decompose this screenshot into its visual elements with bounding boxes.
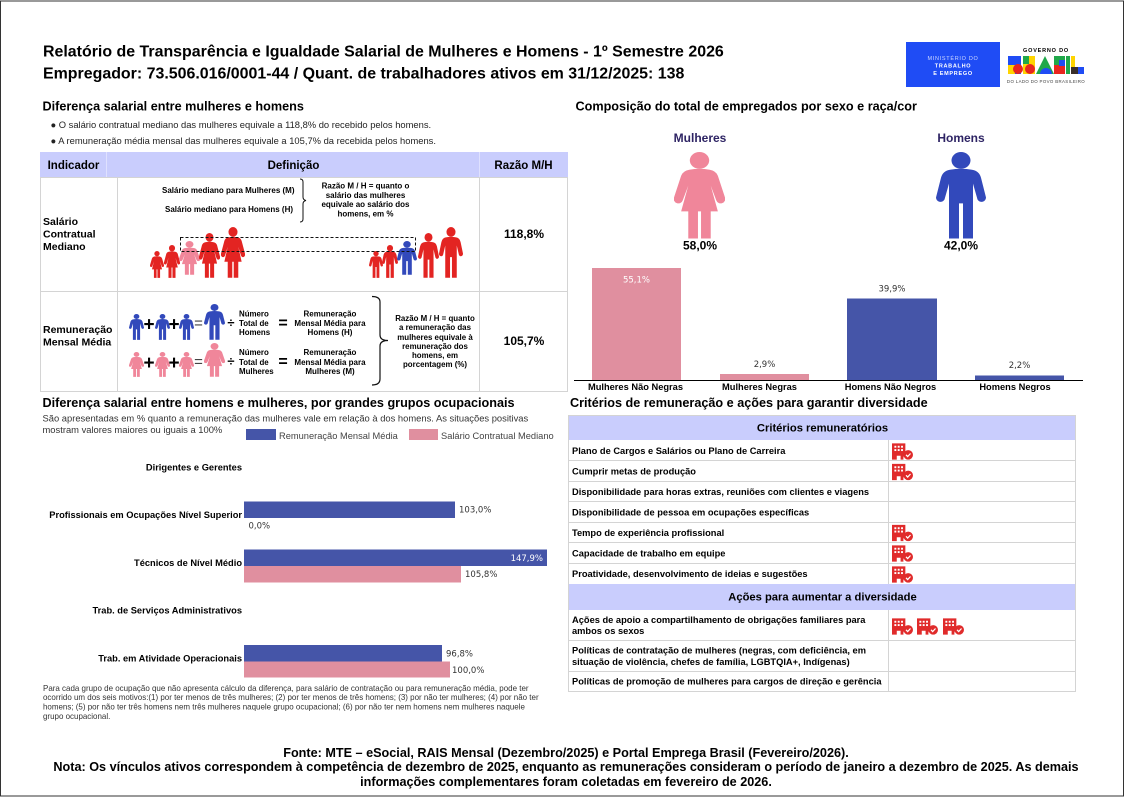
- footer: fonte e nota: Fonte: MTE – eSocial, RAIS Mensal (Dezembro/2025) e Portal Emprega Brasil (Fevereiro/2026).: [283, 746, 849, 760]
- group: atividade operacional: 100,0%: [452, 666, 484, 676]
- footer: fonte e nota: [53, 746, 1079, 789]
- title: Empregador: 73.506.016/0001-44 / Quant. de trabalhadores ativos em 31/12/2025: 138: [43, 66, 685, 82]
- action rows: situação de violência, chefes de família, LGBTQIA+, Indígenas): [572, 657, 850, 667]
- bar chart: composição por raça/cor: 2,9%: [754, 360, 775, 370]
- text: remuneração homens: [294, 310, 366, 337]
- group: profissionais nível superior: [49, 502, 491, 532]
- icon: fórmula homens: [129, 304, 235, 340]
- icon: fórmula mulheres: +: [143, 353, 155, 374]
- group: dirigentes e gerentes: Dirigentes e Gerentes: [146, 462, 242, 472]
- figure: homens 42%: [936, 131, 986, 252]
- icon: fórmula homens: ÷: [227, 315, 235, 330]
- criteria rows: Capacidade de trabalho em equipe: [572, 548, 725, 558]
- criteria rows: Plano de Cargos e Salários ou Plano de Carreira: [572, 446, 786, 456]
- legend: [246, 429, 554, 441]
- heading: diferença salarial: Diferença salarial entre mulheres e homens: [42, 100, 304, 114]
- text: número total de mulheres: Número: [239, 348, 269, 357]
- text: explicação razão: remuneração dos: [402, 342, 469, 351]
- value: razão salário mediano: 118,8%: [504, 227, 544, 241]
- logo: Governo do Brasil: GOVERNO DO: [1023, 48, 1069, 54]
- text: número total de mulheres: Mulheres: [239, 367, 274, 376]
- group: atividade operacional: 96,8%: [446, 650, 473, 660]
- figure: homens 42%: 42,0%: [944, 238, 978, 252]
- table header: Definição: [268, 160, 319, 172]
- text: nota de ocupações: grupo ocupacional.: [43, 712, 110, 721]
- group: técnicos de nível médio: Técnicos de Nível Médio: [134, 558, 242, 568]
- row: salário contratual mediano: Contratual: [43, 228, 96, 240]
- text: explicação razão: porcentagem (%): [403, 360, 467, 369]
- text: remuneração mulheres: Mulheres (M): [305, 367, 355, 376]
- group: profissionais nível superior: Profissionais em Ocupações Nível Superior: [49, 510, 242, 520]
- text: remuneração mulheres: Mensal Média para: [294, 358, 366, 367]
- heading: composição: Composição do total de empregados por sexo e raça/cor: [576, 100, 917, 114]
- bar chart: grupos ocupacionais: [49, 462, 547, 678]
- group: técnicos de nível médio: 105,8%: [465, 570, 497, 580]
- group: profissionais nível superior: 0,0%: [248, 522, 270, 532]
- legend: Remuneração Mensal Média: [279, 431, 399, 441]
- bar chart: composição por raça/cor: Mulheres Não Negras: [588, 382, 683, 392]
- text: explicação do gráfico: São apresentadas em % quanto a remuneração das mulheres vale em relação à dos homens. As situações positivas: [42, 414, 529, 424]
- icon: fórmula mulheres: +: [168, 353, 180, 374]
- icons: ações adotadas: [892, 618, 964, 635]
- row: remuneração mensal média: [43, 296, 475, 385]
- row: salário contratual mediano: Razão M / H = quanto o: [322, 182, 410, 190]
- bar chart: composição por raça/cor: 39,9%: [878, 284, 906, 294]
- text: nota de ocupações: ocorrido um dos seis motivos:(1) por ter menos de três mulheres; (2) por ter menos de três homens; (3) por não ter mulheres; (4) por não ter: [43, 693, 539, 702]
- bullet text: ● A remuneração média mensal das mulheres equivale a 105,7% da recebida pelos homens.: [50, 136, 436, 146]
- group: profissionais nível superior: 103,0%: [459, 506, 491, 516]
- logo: Governo do Brasil: [1007, 48, 1085, 84]
- text: remuneração homens: Mensal Média para: [294, 319, 366, 328]
- bullet text: [50, 120, 436, 146]
- row: remuneração mensal média: =: [278, 354, 288, 370]
- table: indicadores salariais: [40, 152, 568, 392]
- row: salário contratual mediano: Mediano: [43, 241, 86, 253]
- bullet text: ● O salário contratual mediano das mulheres equivale a 118,8% do recebido pelos homens.: [50, 120, 431, 130]
- icon: fórmula mulheres: ÷: [227, 354, 235, 368]
- heading: grupos ocupacionais: Diferença salarial entre homens e mulheres, por grandes grupos ocupacionais: [42, 396, 515, 410]
- action rows: Ações de apoio a compartilhamento de obrigações familiares para: [572, 615, 866, 625]
- row: salário contratual mediano: Salário mediano para Homens (H): [165, 205, 293, 214]
- criteria rows: Proatividade, desenvolvimento de ideias e sugestões: [572, 569, 808, 579]
- icon: família de mulheres: [150, 227, 245, 278]
- icon: fórmula mulheres: =: [194, 354, 203, 370]
- text: explicação do gráfico: mostram valores maiores ou iguais a 100%: [42, 425, 222, 435]
- table header: Razão M/H: [494, 160, 553, 172]
- row: remuneração mensal média: Remuneração: [43, 324, 112, 336]
- group: atividade operacional: [98, 645, 484, 678]
- group: serviços administrativos: Trab. de Serviços Administrativos: [92, 606, 242, 616]
- text: remuneração mulheres: Remuneração: [304, 348, 357, 357]
- bar chart: composição por raça/cor: Homens Negros: [979, 382, 1051, 392]
- group: técnicos de nível médio: [134, 550, 547, 582]
- text: explicação razão: Razão M / H = quanto: [395, 314, 475, 323]
- icon: fórmula mulheres: [129, 343, 235, 377]
- action rows: [572, 615, 882, 686]
- text: número total de mulheres: [239, 348, 274, 376]
- figure: mulheres 58%: [674, 131, 727, 252]
- row: salário contratual mediano: Salário: [43, 216, 78, 228]
- figure: mulheres 58%: 58,0%: [683, 238, 717, 252]
- footer: fonte e nota: Nota: Os vínculos ativos correspondem à competência de dezembro de 2025, enquanto as remunerações consideram o período de janeiro a dezembro de 2025. As demais: [53, 760, 1079, 774]
- criteria rows: Disponibilidade para horas extras, reuniões com clientes e viagens: [572, 487, 869, 497]
- row: salário contratual mediano: salário das mulheres: [326, 191, 406, 200]
- row: salário contratual mediano: homens, em %: [337, 210, 394, 218]
- row: remuneração mensal média: =: [278, 315, 288, 332]
- row: salário contratual mediano: [43, 179, 463, 278]
- text: remuneração homens: Homens (H): [308, 328, 353, 337]
- text: explicação do gráfico: [42, 414, 529, 435]
- header: ações: Ações para aumentar a diversidade: [728, 592, 917, 604]
- table: critérios e ações: [568, 415, 1076, 692]
- bar chart: composição por raça/cor: Mulheres Negras: [722, 382, 797, 392]
- text: nota de ocupações: homens; (5) por não ter três homens nem três mulheres naquele grupo ocupacional; (6) por não ter nem homens nem mulheres naquele: [43, 702, 525, 712]
- title: Relatório de Transparência e Igualdade Salarial de Mulheres e Homens - 1º Semestre 2026: [43, 44, 724, 60]
- criteria rows: Tempo de experiência profissional: [572, 528, 724, 538]
- bar chart: composição por raça/cor: 2,2%: [1009, 361, 1030, 371]
- bar chart: composição por raça/cor: 55,1%: [623, 276, 650, 286]
- text: nota de ocupações: Para cada grupo de ocupação que não apresenta cálculo da diferença, para salário de contratação ou para remuneração média, pode ter: [43, 684, 529, 693]
- text: explicação razão: [395, 314, 475, 369]
- icons: critérios adotados: [892, 443, 913, 583]
- icon: fórmula homens: +: [168, 314, 180, 336]
- icon: fórmula homens: +: [143, 314, 155, 336]
- action rows: Políticas de promoção de mulheres para cargos de direção e gerência: [572, 676, 882, 686]
- criteria rows: Cumprir metas de produção: [572, 466, 696, 476]
- heading: critérios: Critérios de remuneração e ações para garantir diversidade: [570, 396, 928, 410]
- action rows: Políticas de contratação de mulheres (negras, com deficiência, em: [572, 646, 866, 656]
- footer: fonte e nota: informações complementares foram coletadas em fevereiro de 2026.: [360, 775, 772, 789]
- group: atividade operacional: Trab. em Atividade Operacionais: [98, 654, 242, 664]
- group: técnicos de nível médio: 147,9%: [511, 554, 543, 564]
- logo: Ministério do Trabalho e Emprego: [906, 42, 1000, 87]
- text: número total de homens: Número: [239, 310, 269, 318]
- logo: Ministério do Trabalho e Emprego: TRABALHO: [935, 64, 971, 70]
- text: número total de mulheres: Total de: [239, 358, 269, 367]
- logo: Ministério do Trabalho e Emprego: MINISTÉRIO DO: [928, 55, 978, 62]
- header: critérios remuneratórios: Critérios remuneratórios: [757, 422, 888, 434]
- legend: Salário Contratual Mediano: [441, 431, 554, 441]
- table header: [40, 152, 568, 177]
- icon: família de homens: [369, 227, 463, 278]
- text: número total de homens: Homens: [239, 328, 271, 337]
- figure: homens 42%: Homens: [937, 131, 985, 145]
- text: remuneração homens: Remuneração: [304, 310, 357, 318]
- text: nota de ocupações: [43, 684, 539, 721]
- text: remuneração mulheres: [294, 348, 366, 376]
- title: [43, 44, 724, 82]
- row: salário contratual mediano: Salário mediano para Mulheres (M): [162, 186, 295, 195]
- criteria rows: Disponibilidade de pessoa em ocupações específicas: [572, 508, 809, 518]
- text: explicação razão: mulheres equivale à: [397, 333, 473, 342]
- text: número total de homens: Total de: [239, 319, 269, 328]
- table header: Indicador: [48, 160, 100, 172]
- text: explicação razão: homens, em: [412, 351, 458, 360]
- criteria rows: [572, 446, 869, 579]
- bar chart: composição por raça/cor: Homens Não Negros: [845, 382, 936, 392]
- bar chart: composição por raça/cor: [574, 268, 1083, 392]
- logo: Governo do Brasil: DO LADO DO POVO BRASILEIRO: [1007, 79, 1085, 84]
- text: número total de homens: [239, 310, 271, 337]
- action rows: ambos os sexos: [572, 626, 644, 636]
- text: explicação razão: a remuneração das: [399, 323, 472, 332]
- figure: mulheres 58%: Mulheres: [674, 131, 727, 145]
- value: razão remuneração média: 105,7%: [504, 334, 545, 348]
- row: salário contratual mediano: equivale ao salário dos: [321, 200, 410, 209]
- logo: Ministério do Trabalho e Emprego: E EMPREGO: [933, 71, 973, 77]
- row: remuneração mensal média: Mensal Média: [43, 336, 111, 348]
- icon: fórmula homens: =: [194, 315, 203, 332]
